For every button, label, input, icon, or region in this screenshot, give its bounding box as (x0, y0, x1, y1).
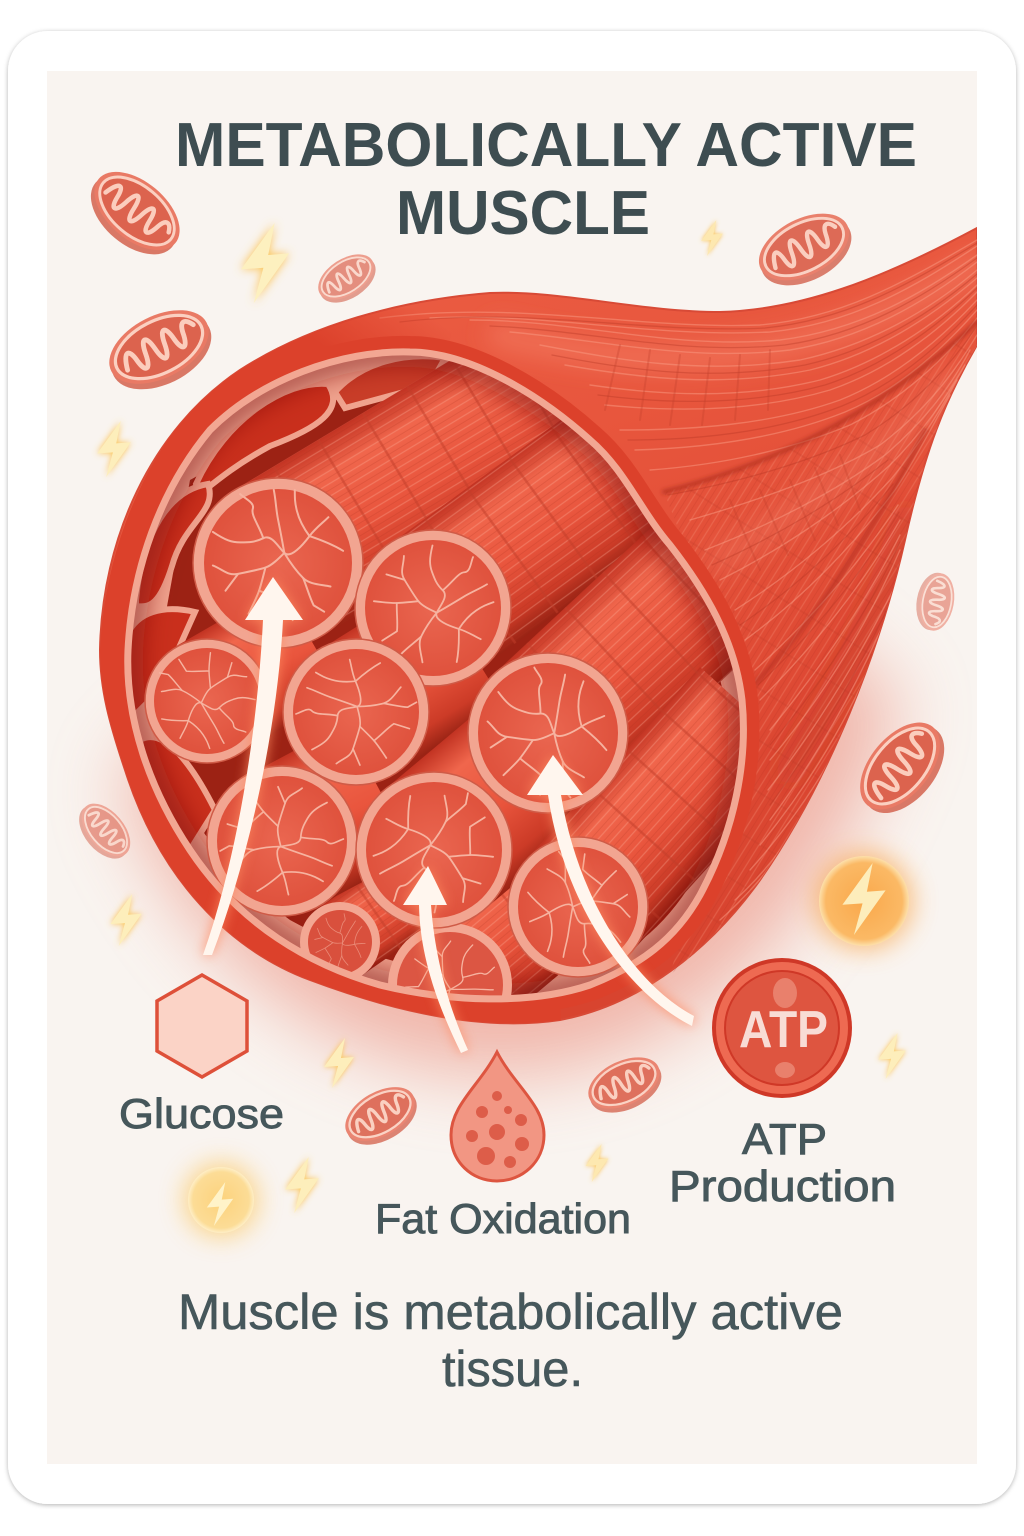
title: MUSCLE (396, 179, 650, 248)
label: ATP production: ATP (742, 1115, 827, 1164)
title: METABOLICALLY ACTIVE (175, 111, 917, 180)
label: ATP production (669, 1115, 896, 1211)
title (175, 111, 917, 248)
caption: tissue. (442, 1341, 583, 1397)
lobe highlights (500, 265, 977, 358)
outer muscle body (100, 228, 977, 1023)
dark interior (167, 400, 722, 961)
energy bolts (97, 220, 906, 1213)
muscle cross-section illustration (100, 228, 977, 1047)
cap C (145, 639, 269, 763)
label: ATP production: Production (669, 1162, 896, 1211)
energy orb: yellow (183, 1162, 259, 1238)
arrow: fat oxidation to muscle (403, 866, 468, 1053)
cap J (388, 924, 512, 996)
cap A (193, 478, 363, 648)
cap D (283, 639, 429, 785)
cap I (300, 902, 380, 982)
cross striations (605, 345, 860, 570)
bundle tubes, back to front (176, 315, 804, 1032)
arrow: ATP production to muscle (527, 755, 694, 1026)
exterior fibres (380, 240, 977, 920)
cap B (355, 530, 511, 686)
cap F (207, 766, 357, 916)
icon: ATP badge: ATP (739, 1001, 828, 1059)
opening interior (128, 352, 743, 999)
left wall (128, 336, 560, 1001)
cap G (356, 772, 512, 928)
fascicle pockets (125, 356, 445, 850)
muscle bundles (131, 355, 740, 996)
lobe creases (664, 322, 977, 492)
bundle end caps (145, 478, 648, 1047)
sheath red band (362, 336, 760, 950)
lower lobe texture (664, 322, 977, 975)
arrow: glucose to muscle (203, 577, 303, 955)
energy orb: orange (814, 851, 914, 951)
caption (178, 1284, 843, 1397)
icon: ATP badge (712, 958, 852, 1098)
icon: glucose hexagon (157, 975, 247, 1077)
caption: Muscle is metabolically active (178, 1284, 843, 1340)
label: fat oxidation: Fat Oxidation (375, 1195, 631, 1242)
muscle shadow glow (120, 600, 900, 1075)
mitochondria (69, 157, 960, 1156)
cap H (508, 837, 648, 977)
interior depth shadow (128, 352, 743, 999)
label: glucose: Glucose (119, 1090, 284, 1137)
sheath lip (128, 352, 743, 999)
icon: fat droplet (451, 1052, 544, 1181)
cap E (468, 653, 628, 813)
